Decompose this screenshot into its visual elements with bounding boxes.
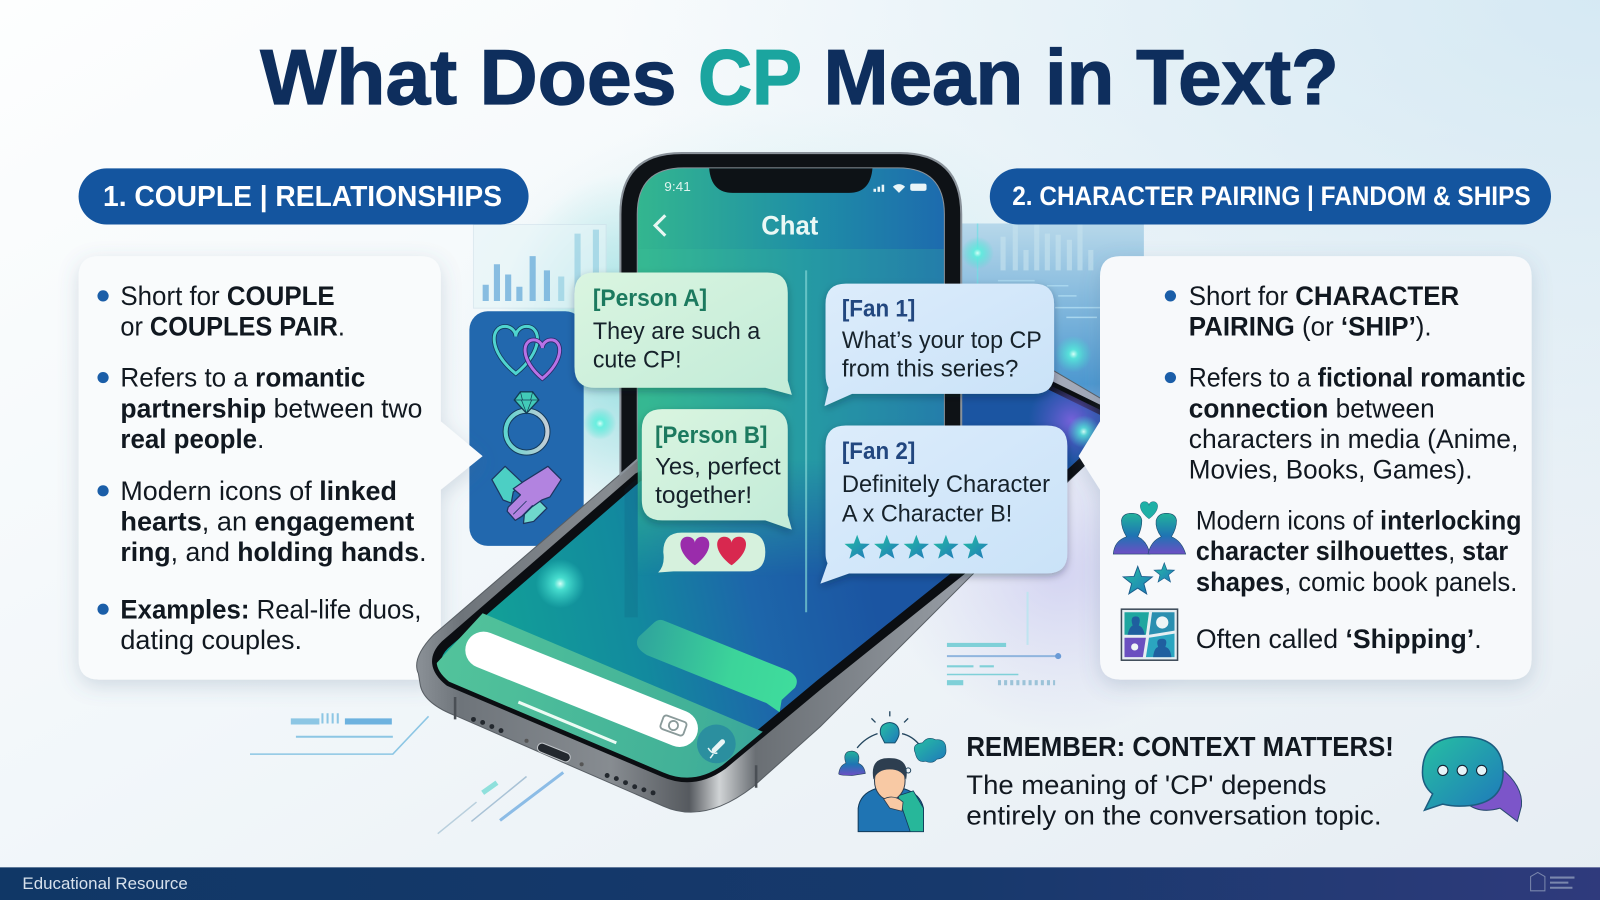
icon: chat bubbles (1422, 737, 1522, 821)
home indicator (518, 702, 616, 743)
decorative lines right (947, 592, 1061, 683)
callout: context matters: The meaning of 'CP' depends (966, 770, 1327, 800)
footer logo (1531, 872, 1574, 891)
text: refers to: partnership between two (120, 393, 422, 423)
section heading 1: 1. COUPLE | RELATIONSHIPS (103, 181, 502, 213)
text: examples: dating couples. (120, 625, 302, 655)
text: modern icons (1196, 506, 1521, 597)
port and speakers (455, 697, 756, 795)
glow dots (536, 237, 1100, 608)
text: short for (120, 281, 345, 342)
text: refers to (120, 363, 422, 454)
bubble: person A: They are such a (593, 318, 761, 345)
bubble: person B: together! (655, 482, 752, 509)
text: short for: Short for COUPLE (120, 281, 335, 311)
bullets (97, 290, 109, 615)
bubble: person B: [Person B] (655, 422, 767, 449)
bullets (1165, 290, 1176, 383)
bubble: hearts (658, 533, 765, 572)
text: examples (120, 594, 421, 655)
back chevron (655, 215, 665, 236)
bubble: fan 1 (824, 284, 1054, 406)
decorative chart left (473, 224, 606, 308)
panel: icon strip (469, 311, 584, 546)
text: refers to: Refers to a romantic (120, 363, 365, 393)
title (260, 35, 1339, 121)
panel: couple (79, 256, 483, 680)
text: refers to: characters in media (Anime, (1189, 424, 1518, 454)
chat header: Chat (761, 211, 819, 241)
icon: linked hearts (494, 326, 560, 378)
title: Mean in Text? (823, 35, 1339, 121)
footer bar (0, 867, 1600, 900)
text: modern icons (120, 476, 427, 567)
section heading 2: 2. CHARACTER PAIRING | FANDOM & SHIPS (1012, 181, 1531, 211)
bubble: fan 1: What’s your top CP (842, 327, 1042, 354)
text: modern icons: ring, and holding hands. (120, 537, 427, 567)
icon: comic panels (1121, 609, 1178, 660)
text: short for (1189, 281, 1459, 342)
bubble: fan 1: [Fan 1] (842, 295, 915, 322)
bubble: fan 2: [Fan 2] (842, 438, 915, 465)
bubble: person B: Yes, perfect (655, 453, 781, 480)
text: modern icons: Modern icons of interlocking (1196, 506, 1521, 536)
text: refers to: real people. (120, 424, 264, 454)
callout: context matters (966, 731, 1394, 830)
text: modern icons: character silhouettes, star (1196, 536, 1509, 566)
phone (408, 153, 1117, 812)
bubble: person A: cute CP! (593, 346, 682, 373)
icon: thinking person (839, 711, 946, 832)
icon: silhouettes (1113, 502, 1186, 554)
text: short for: PAIRING (or ‘SHIP’). (1189, 312, 1432, 342)
status time: 9:41 (664, 179, 691, 194)
section heading 1 (79, 168, 529, 224)
title: CP (698, 35, 802, 121)
text: refers to (1189, 363, 1526, 485)
rating stars (844, 535, 988, 559)
decorative lines bottom left (250, 716, 563, 834)
text: modern icons: shapes, comic book panels. (1196, 567, 1517, 597)
phone tilted body (417, 316, 1117, 812)
bubble: fan 2: A x Character B! (842, 500, 1012, 527)
text: modern icons: hearts, an engagement (120, 507, 414, 537)
phone upright frame (620, 153, 961, 474)
input bar (484, 650, 680, 729)
decorative chart right (978, 223, 1100, 317)
phone upright screen (638, 168, 944, 602)
text: short for: Short for CHARACTER (1189, 281, 1459, 311)
text: shipping: Often called ‘Shipping’. (1196, 624, 1482, 654)
text: refers to: Movies, Books, Games). (1189, 455, 1472, 485)
panel: character pairing (1079, 256, 1532, 680)
bubble: fan 2 (820, 426, 1067, 584)
icon: mic button (697, 724, 736, 763)
section heading 2 (990, 168, 1551, 224)
callout: context matters: entirely on the conversation topic. (966, 800, 1382, 830)
icon: holding hands (492, 466, 561, 523)
text: refers to: Refers to a fictional romantic (1189, 363, 1526, 393)
bubble: fan 1: from this series? (842, 356, 1018, 383)
reply bubble (637, 620, 797, 712)
notch (709, 168, 872, 193)
text: refers to: connection between (1189, 393, 1435, 423)
icon: engagement ring (506, 392, 547, 453)
text: modern icons: Modern icons of linked (120, 476, 397, 506)
text: examples: Examples: Real-life duos, (120, 594, 421, 624)
divider (805, 270, 807, 612)
status icons (873, 184, 927, 193)
bubble: person A (574, 272, 792, 395)
title: What Does (260, 35, 677, 121)
bubble: fan 2: Definitely Character (842, 471, 1050, 498)
icon: stars (1123, 563, 1174, 594)
callout: context matters: REMEMBER: CONTEXT MATTERS! (966, 731, 1394, 762)
footer label: Educational Resource (22, 874, 188, 893)
icon: camera (660, 715, 687, 736)
bubble: person B (642, 409, 792, 530)
text: short for: or COUPLES PAIR. (120, 312, 345, 342)
bubble: person A: [Person A] (593, 285, 707, 312)
phone tilted screen (432, 382, 1100, 782)
